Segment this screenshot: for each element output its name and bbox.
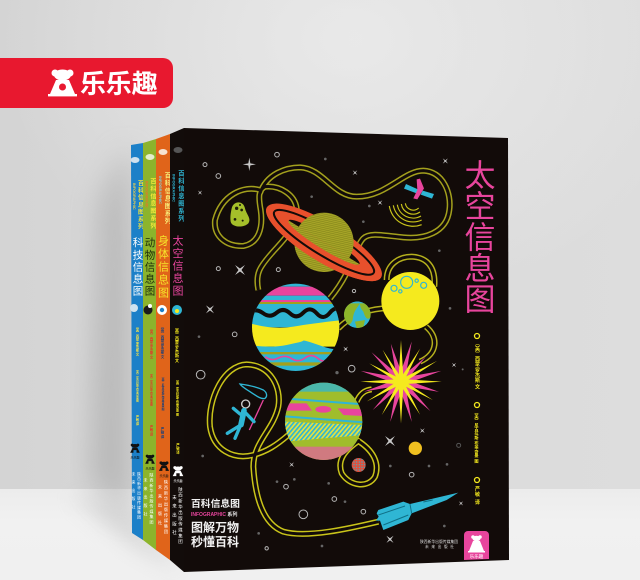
spine icon	[144, 304, 152, 314]
authors: 〔美〕尼古拉斯·布莱奇曼 图	[136, 368, 139, 403]
book spine: blue	[130, 143, 144, 540]
series name: 百科信息图系列	[136, 180, 144, 230]
banded planet	[283, 382, 365, 463]
publisher badge	[464, 531, 489, 560]
publisher logo	[173, 466, 183, 483]
authors: 〔美〕尼古拉斯·布莱奇曼 图	[150, 372, 153, 407]
authors: 〔美〕尼古拉斯·布莱奇曼 图	[161, 375, 165, 411]
yellow moon	[381, 272, 439, 330]
spine title: 动物信息图	[144, 237, 156, 298]
publisher: 陕西新华出版传媒集团	[136, 471, 142, 520]
moon and star tracks	[338, 257, 435, 362]
series latin: INFOGRAPHIC	[144, 181, 148, 208]
spine icon	[157, 305, 167, 315]
series tagline: 图解万物	[191, 520, 239, 534]
small gold planet	[409, 442, 422, 455]
series name: 百科信息图系列	[164, 172, 171, 225]
book spine: green	[143, 139, 156, 550]
publisher	[172, 486, 184, 545]
asteroid	[230, 202, 249, 227]
spine title: 太空信息图	[171, 235, 184, 297]
publisher logo: 乐乐趣	[159, 473, 169, 478]
credit: translator	[474, 478, 480, 506]
cover illustration	[196, 152, 465, 550]
authors: 严敏 译	[135, 415, 139, 426]
signal arcs	[389, 203, 422, 226]
authors	[135, 325, 139, 426]
publisher	[157, 479, 169, 535]
astronaut and net	[227, 384, 267, 438]
credit: illustrator: 〔美〕尼古拉斯·布莱奇曼 图	[474, 410, 480, 464]
publisher: 陕西新华出版传媒集团	[420, 539, 458, 544]
spiky star	[360, 340, 442, 423]
rocket	[376, 493, 458, 530]
publisher logo	[159, 461, 169, 478]
book shadow	[70, 150, 180, 572]
icon: bear logo	[48, 70, 77, 96]
publisher logo	[145, 455, 155, 470]
floor	[0, 489, 640, 580]
publisher badge: 乐乐趣	[470, 553, 484, 560]
publisher logo: 乐乐趣	[130, 454, 140, 460]
spine title: 身体信息图	[156, 234, 169, 300]
small red planet	[352, 458, 366, 472]
series logo	[130, 157, 140, 163]
upper orbit track	[215, 167, 450, 298]
credit: author: 〔英〕西蒙·罗杰斯 文	[474, 341, 480, 390]
publisher: 未来出版社	[157, 484, 163, 529]
book spine: black	[170, 128, 184, 572]
authors: 〔英〕西蒙·罗杰斯 文	[175, 325, 180, 363]
authors	[175, 325, 180, 455]
cover title: 太空信息图	[460, 159, 495, 314]
authors: 严敏 译	[175, 443, 180, 455]
publisher: 陕西新华出版传媒集团	[178, 486, 184, 545]
authors: 〔英〕西蒙·罗杰斯 文	[149, 327, 153, 359]
series tagline: INFOGRAPHIC 系列	[191, 511, 237, 518]
authors	[160, 325, 165, 439]
series name: 百科信息图系列	[177, 170, 184, 223]
authors: 〔英〕西蒙·罗杰斯 文	[160, 325, 165, 359]
publisher: 未来出版社	[144, 477, 148, 520]
series name: 百科信息图系列	[149, 178, 156, 230]
publisher: 未来出版社	[425, 544, 456, 549]
authors: 严敏 译	[149, 425, 153, 436]
ringed planet	[266, 204, 382, 282]
publisher	[420, 539, 458, 549]
publisher logo: 乐乐趣	[145, 466, 155, 470]
publisher: 陕西新华出版传媒集团	[163, 479, 169, 535]
series latin: INFOGRAPHIC	[158, 176, 163, 204]
book spine: orange	[156, 134, 171, 560]
publisher: 陕西新华出版传媒集团	[150, 472, 154, 525]
satellite	[404, 179, 434, 199]
brand badge	[0, 58, 173, 108]
series tagline: 秒懂百科	[191, 534, 239, 549]
series latin: INFOGRAPHIC	[132, 183, 136, 210]
background stars	[196, 152, 465, 550]
publisher: 未来出版社	[131, 471, 136, 514]
publisher	[131, 471, 142, 520]
authors: 〔英〕西蒙·罗杰斯 文	[135, 325, 139, 356]
authors	[149, 327, 153, 436]
series tagline: 百科信息图	[191, 497, 240, 510]
lower orbit track	[210, 364, 378, 534]
striped planet	[252, 284, 340, 371]
credit: translator: 严敏 译	[474, 486, 480, 506]
authors: 严敏 译	[160, 427, 165, 439]
publisher logo	[130, 444, 140, 460]
spine title: 科技信息图	[132, 236, 144, 298]
authors: 〔美〕尼古拉斯·布莱奇曼 图	[176, 378, 180, 416]
publisher: 未来出版社	[172, 494, 178, 539]
front cover	[184, 128, 509, 572]
spine icon	[172, 305, 182, 315]
spine icon	[130, 304, 138, 312]
badge wordmark: 乐乐趣	[80, 69, 158, 99]
series tagline	[191, 497, 240, 549]
earth	[343, 301, 372, 328]
publisher logo: 乐乐趣	[173, 478, 183, 483]
publisher	[144, 472, 154, 525]
series latin: INFOGRAPHIC	[172, 174, 176, 202]
